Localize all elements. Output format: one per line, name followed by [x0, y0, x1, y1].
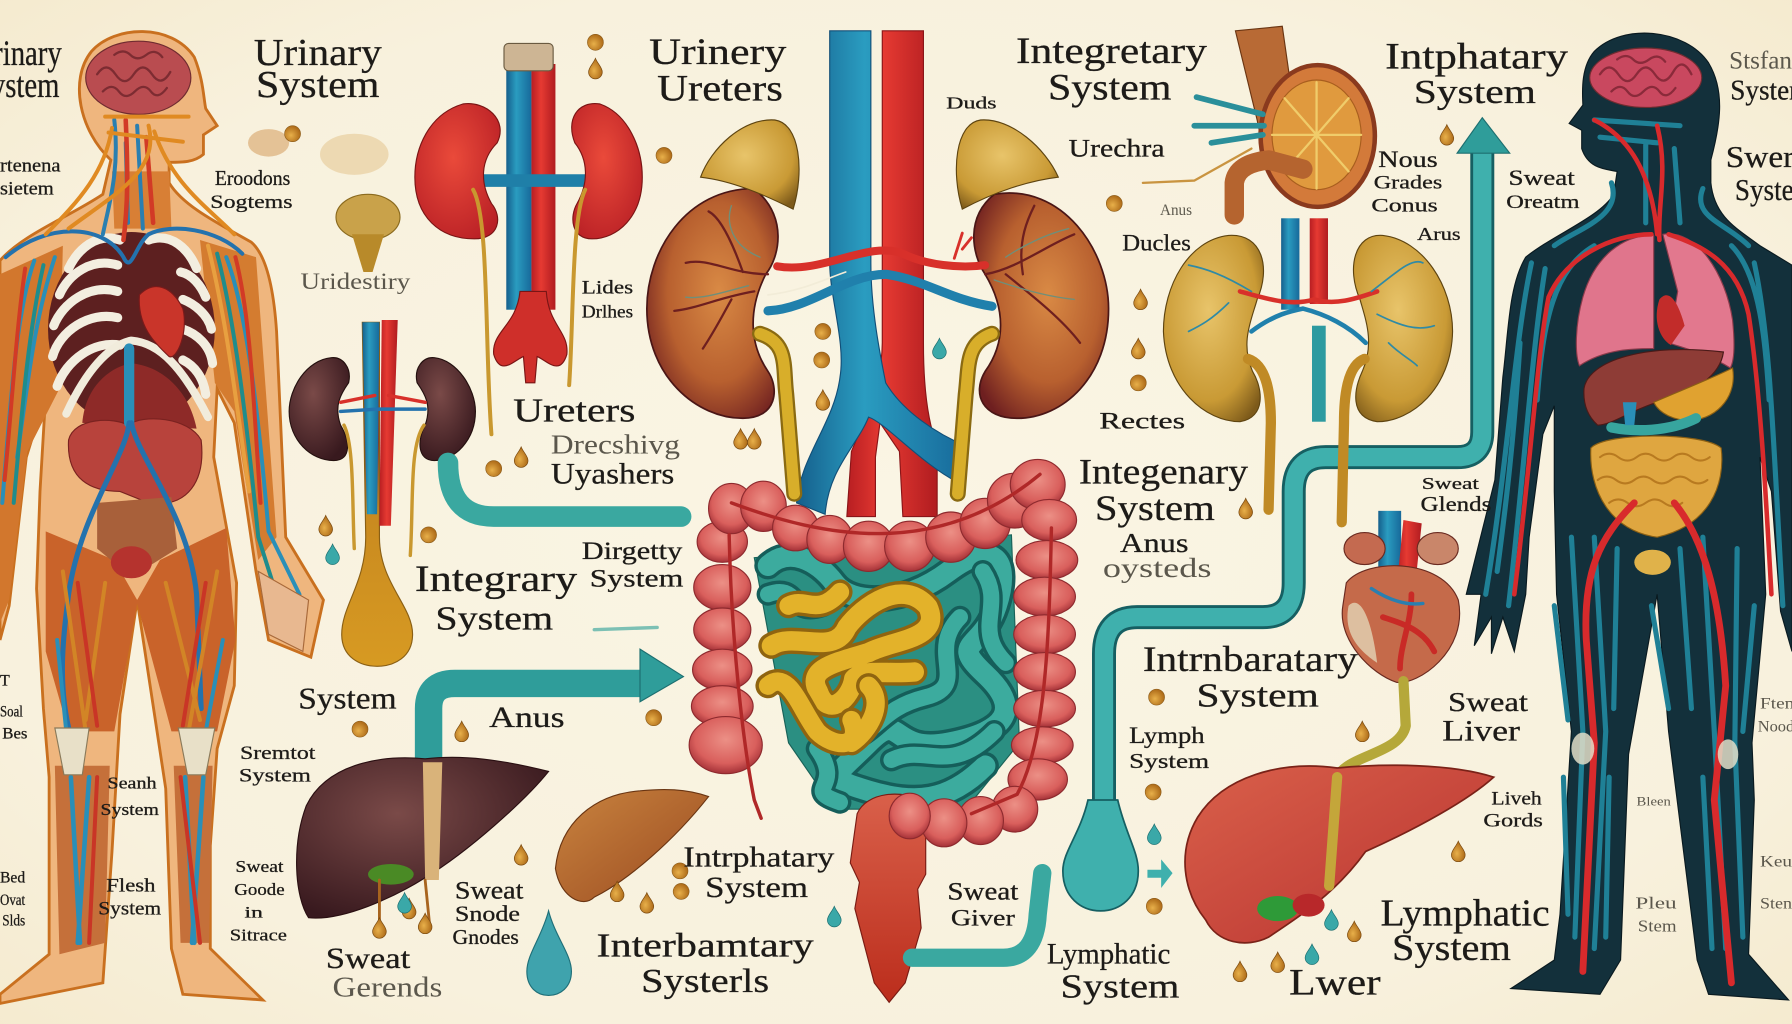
label: Lides: Drlhes	[582, 302, 633, 322]
left gold kidney	[1163, 235, 1264, 422]
dark liver body	[297, 757, 549, 918]
panel: right human body	[1466, 33, 1792, 1000]
right yellow intestine	[1591, 436, 1722, 537]
label: Sweat Liver: Sweat	[1448, 687, 1528, 717]
horizontal vessel	[472, 175, 589, 186]
right red arteries	[1514, 120, 1771, 983]
label: small side text left: sietem	[0, 178, 54, 199]
label: Sweat Goode: in	[245, 905, 263, 922]
heading: Urinary System left: System	[256, 64, 379, 106]
heart body	[1342, 566, 1460, 683]
left body muscles	[0, 171, 277, 954]
label: Sweat Oreatm: Oreatm	[1506, 192, 1579, 213]
left dark kidney	[289, 358, 349, 461]
teal bulb	[1063, 800, 1138, 911]
label: Flesh System	[98, 875, 161, 919]
heading: Intphatary System	[1385, 36, 1569, 111]
label: Seanh System: Seanh	[107, 774, 157, 793]
olive ligament	[1329, 777, 1337, 886]
heading: cut-off Urinary System far left	[0, 33, 62, 105]
label: Lymph System	[1129, 723, 1209, 773]
label: Anus small: Anus	[1160, 202, 1192, 219]
panel: red liver	[1185, 765, 1494, 943]
small teal connector	[594, 627, 657, 630]
panel: top-left-centre red kidneys	[415, 43, 642, 434]
label: Integenary System block: System	[1095, 488, 1215, 528]
icon: large teal drop	[527, 911, 571, 995]
red central vessel	[847, 31, 937, 517]
label: Uridestiry: Uridestiry	[301, 269, 411, 294]
label: Intrnbaratary System: Intrnbaratary	[1143, 639, 1358, 679]
label: Arus: Arus	[1417, 224, 1461, 244]
label: Lymph System: System	[1129, 751, 1209, 773]
label: Sweat Glends: Sweat	[1422, 474, 1479, 493]
arrow: small teal arrow	[1147, 859, 1173, 888]
label: right small fragments: Sten	[1760, 896, 1792, 913]
label: Liveh Gords	[1483, 789, 1543, 831]
label: Integrary System: System	[435, 600, 554, 638]
gold ureters	[1248, 359, 1365, 522]
label: small side text left: Eroodons	[215, 168, 290, 190]
urethra line	[1143, 149, 1251, 183]
heading: Intphatary System: System	[1414, 73, 1536, 111]
label: Nous Grades Conus: Grades	[1374, 173, 1442, 194]
connecting olive tube	[1331, 681, 1406, 880]
left heart	[139, 287, 184, 357]
label: Integenary System block: oysteds	[1103, 553, 1211, 583]
label: Ureters block: Ureters	[513, 392, 635, 430]
panel: orange liver	[555, 790, 709, 902]
label: Intrnbaratary System	[1143, 639, 1358, 714]
label: Sweat Snode Gnodes: Gnodes	[453, 927, 519, 949]
label: Lymphatic System right: System	[1392, 927, 1511, 968]
left hand detail	[258, 571, 309, 651]
label: Rectes: Rectes	[1099, 409, 1185, 434]
atria	[1344, 533, 1385, 565]
vessels	[1281, 218, 1299, 310]
blue central vessel	[797, 31, 966, 514]
label: right small fragments: Keu	[1760, 853, 1792, 870]
label: Sremtot System: System	[239, 766, 311, 787]
label: far-left fragments: Ovat	[0, 892, 26, 909]
label: Urinery Ureters: Ureters	[657, 68, 783, 109]
label: far-left fragments: Slds	[2, 913, 25, 930]
label: System: System	[298, 682, 397, 716]
gold tubes	[344, 425, 424, 555]
label: Sweat Snode Gnodes	[453, 877, 523, 949]
great vessels	[1378, 511, 1401, 585]
left kidney	[647, 189, 778, 418]
label: Urinery Ureters: Urinery	[649, 31, 787, 72]
label: Sweat Liver	[1442, 687, 1528, 748]
arrow: lower teal pipe	[912, 873, 1042, 958]
label: Flesh System: Flesh	[106, 875, 156, 896]
gold ureters	[473, 190, 585, 434]
label: Nous Grades Conus: Conus	[1371, 195, 1438, 216]
label: Sweat Giver: Sweat	[947, 878, 1018, 905]
heading: right edge labels: Swer	[1726, 140, 1792, 174]
label: Interbamtary Systerls: Systerls	[641, 962, 769, 1000]
label: Sremtot System	[239, 743, 316, 787]
label: Intrphatary System lower: Intrphatary	[683, 842, 835, 873]
label: far-left fragments: T	[0, 673, 10, 690]
panel: central kidneys and great vessels	[647, 31, 1109, 517]
label: Lymphatic System lower centre: Lymphatic	[1047, 938, 1170, 970]
panel: heart	[1342, 511, 1460, 683]
label: Dirgetty System	[582, 538, 684, 592]
label: Liveh Gords: Liveh	[1491, 789, 1542, 810]
label: Lymph System: Lymph	[1129, 723, 1205, 748]
label: Sweat Gerends: Gerends	[333, 973, 442, 1004]
label: far-left fragments: Soal	[0, 704, 23, 721]
label: Lwer: Lwer	[1289, 961, 1381, 1002]
panel: gold kidneys	[1163, 218, 1453, 522]
small intestine base	[754, 535, 1019, 809]
label: right small fragments	[1635, 696, 1792, 935]
kidney veins	[674, 206, 1080, 349]
heading: right edge labels: Stsfan	[1729, 48, 1792, 75]
label: Sremtot System: Sremtot	[240, 743, 316, 764]
left brain	[86, 41, 191, 114]
right lungs	[1576, 234, 1734, 368]
red bladder	[494, 291, 567, 383]
label: Sweat Liver: Liver	[1442, 716, 1520, 748]
label: Lides	[582, 278, 633, 322]
droplets and beads	[285, 34, 1465, 982]
label: Integrary System: Integrary	[415, 558, 578, 599]
label: Sweat Snode Gnodes: Snode	[455, 902, 520, 926]
vessel cap	[504, 43, 553, 71]
label: Integenary System block: Integenary	[1079, 451, 1248, 491]
label: Sweat Glends	[1421, 474, 1491, 516]
label: Integenary System block: Anus	[1120, 528, 1189, 558]
panel: urinary bladder gold organ	[248, 129, 400, 272]
colon bands	[729, 474, 1051, 818]
label: Sweat Oreatm	[1506, 166, 1579, 213]
label: Sweat Goode	[230, 857, 287, 945]
label: right small fragments: Bleen	[1637, 795, 1672, 809]
teal vessel network	[1486, 120, 1783, 949]
label: Lymphatic System right	[1381, 893, 1550, 968]
label: Duds: Duds	[946, 94, 997, 113]
right heart	[1657, 295, 1685, 345]
label: Intrphatary System lower	[683, 842, 835, 904]
left rib cage	[48, 232, 215, 426]
gold ligament	[423, 762, 442, 880]
heading: Urinary System left	[254, 32, 382, 106]
heading: Intphatary System: Intphatary	[1385, 36, 1569, 77]
blue vessel with flask	[342, 322, 413, 666]
label: Lymphatic System lower centre: System	[1061, 968, 1180, 1006]
teal vessels	[1194, 97, 1264, 143]
right pelvic organ	[1634, 550, 1671, 575]
organ tube	[1235, 26, 1314, 189]
panel: left human body	[0, 32, 323, 1003]
label: Intrphatary System lower: System	[705, 872, 808, 904]
cross vessels	[1189, 262, 1434, 366]
heading: Integretary System: Integretary	[1016, 30, 1208, 71]
left adrenal	[701, 120, 799, 209]
small intestine teal loops	[768, 555, 1006, 802]
label: Ureters block: Uyashers	[551, 458, 674, 490]
cross vessels	[341, 395, 425, 402]
left abdomen organs	[68, 363, 202, 578]
heading: Integretary System: System	[1048, 66, 1171, 107]
label: Sweat Goode: Sitrace	[230, 926, 287, 945]
label: Sweat Glends: Glends	[1421, 494, 1491, 516]
arrow: teal pipe from dark kidney	[448, 463, 681, 517]
green gallbladder	[368, 864, 414, 885]
right gold kidney	[1353, 235, 1453, 422]
label: Integenary System block	[1079, 451, 1248, 583]
label: Dirgetty System: System	[590, 565, 684, 592]
arrow: big teal pipe	[1063, 118, 1510, 911]
left knees	[55, 728, 215, 775]
yellow intestine loops	[768, 592, 931, 743]
label: Liveh Gords: Gords	[1483, 810, 1543, 831]
label: right small fragments: Ften	[1760, 696, 1792, 713]
label: far-left fragments	[0, 673, 27, 930]
right brain	[1590, 48, 1702, 107]
right liver	[1584, 350, 1723, 425]
label: Ureters block: Drecshivg	[551, 430, 680, 460]
label: small side text left	[0, 155, 293, 213]
label: right small fragments: Stem	[1638, 916, 1677, 935]
label: Intrnbaratary System: System	[1197, 676, 1319, 714]
panel: top orange organ	[1143, 26, 1375, 215]
heading: right edge labels	[1726, 48, 1792, 207]
label: Nous Grades Conus	[1371, 147, 1442, 216]
label: Sweat Goode: Sweat	[235, 857, 284, 876]
heading: Urinary System left: Urinary	[254, 32, 382, 74]
panel: digestive tract	[689, 459, 1078, 1002]
panel: middle-left dark kidneys and flask	[289, 320, 475, 666]
label: Sweat Oreatm: Sweat	[1509, 166, 1575, 190]
left vessels	[2, 117, 299, 943]
label: Lymphatic System lower centre	[1047, 938, 1180, 1006]
label: Sweat Giver	[947, 878, 1018, 931]
right body silhouette	[1466, 33, 1792, 1000]
rectum	[850, 794, 926, 1002]
left body silhouette	[0, 32, 323, 1003]
right red kidney	[572, 104, 642, 239]
label: Seanh System	[101, 774, 160, 819]
label: Nous Grades Conus: Nous	[1378, 147, 1438, 172]
arrow: teal arrow into colon	[429, 649, 683, 759]
label: Sweat Giver: Giver	[951, 906, 1015, 931]
blue and red vessels	[506, 64, 531, 310]
label: Anus: Anus	[489, 702, 565, 734]
teal arrowhead	[1457, 118, 1510, 153]
drips	[379, 880, 430, 926]
label: Sweat Gerends: Sweat	[326, 943, 411, 975]
label: Sweat Snode Gnodes: Sweat	[455, 877, 523, 904]
right kidney	[974, 193, 1109, 418]
label: small side text left: rtenena	[0, 155, 61, 176]
panel: dark liver	[297, 757, 549, 926]
heading: Integretary System	[1016, 30, 1208, 107]
label: Seanh System: System	[101, 800, 160, 819]
label: Lymphatic System right: Lymphatic	[1381, 893, 1550, 935]
gold ureters	[760, 334, 992, 494]
label: Dirgetty System: Dirgetty	[582, 538, 683, 565]
green gallbladder	[1257, 896, 1298, 921]
label: Sweat Goode: Goode	[234, 880, 285, 899]
curved tube	[1234, 160, 1303, 215]
label: Sweat Gerends	[326, 943, 442, 1004]
left red kidney	[415, 104, 500, 239]
label: Urinery Ureters	[649, 31, 787, 109]
citrus cross-section	[1261, 65, 1375, 207]
right stomach	[1654, 368, 1733, 421]
label: far-left fragments: Bes	[2, 725, 27, 742]
large intestine beads	[689, 459, 1078, 847]
label: Urechra: Urechra	[1069, 136, 1165, 163]
right adrenal	[956, 120, 1058, 209]
right knees	[1571, 733, 1738, 769]
label: Flesh System: System	[98, 898, 161, 919]
label: Lides: Lides	[582, 278, 633, 299]
label: far-left fragments: Bed	[0, 869, 25, 886]
label: small side text left: Sogtems	[210, 192, 293, 213]
cross vessels	[768, 233, 992, 311]
label: Interbamtary Systerls: Interbamtary	[597, 927, 814, 965]
label: Ureters block	[513, 392, 680, 490]
right dark kidney	[416, 358, 475, 461]
red liver body	[1185, 765, 1494, 943]
right teal band	[1611, 418, 1696, 430]
label: Integrary System	[415, 558, 578, 638]
label: Ducles: Ducles	[1122, 230, 1191, 255]
label: Interbamtary Systerls	[597, 927, 814, 1000]
label: right small fragments: Pleu	[1635, 894, 1677, 913]
